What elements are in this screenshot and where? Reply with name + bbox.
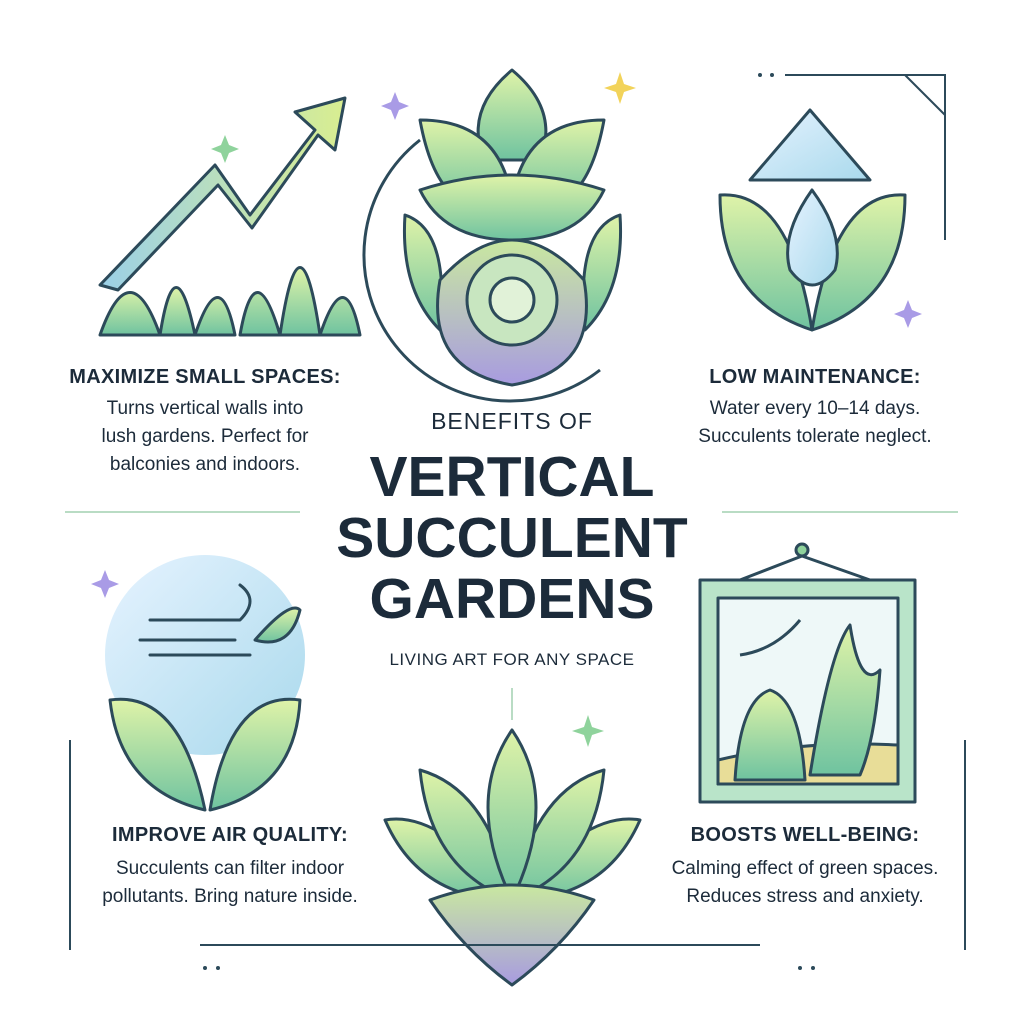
title: LIVING ART FOR ANY SPACE (389, 650, 635, 669)
title: VERTICAL (370, 445, 654, 509)
divider lines (65, 512, 958, 720)
text block: maximize small spaces (69, 366, 341, 475)
text block: maximize small spaces: MAXIMIZE SMALL SPACES: (69, 366, 341, 388)
text block: maximize small spaces: balconies and indoors. (110, 454, 300, 475)
text block: improve air quality: Succulents can filter indoor (116, 858, 344, 879)
title: BENEFITS OF (431, 408, 593, 434)
text block: maximize small spaces: lush gardens. Perfect for (102, 426, 308, 447)
text block: improve air quality: pollutants. Bring nature inside. (102, 886, 358, 907)
text block: improve air quality (102, 824, 358, 907)
text block: improve air quality: IMPROVE AIR QUALITY: (112, 824, 348, 846)
title (336, 408, 688, 669)
text block: boosts well-being: Calming effect of green spaces. (672, 858, 938, 879)
text block: boosts well-being: Reduces stress and anxiety. (686, 886, 924, 907)
icon: growth arrow with plants (100, 98, 360, 335)
title: GARDENS (369, 567, 655, 631)
icon: framed plant (700, 544, 915, 802)
title: SUCCULENT (336, 506, 688, 570)
decorative corners (70, 75, 965, 950)
sparkles (91, 92, 922, 598)
text block: low maintenance (698, 366, 932, 447)
text block: boosts well-being: BOOSTS WELL-BEING: (691, 824, 919, 846)
text block: maximize small spaces: Turns vertical walls into (107, 398, 303, 419)
text block: boosts well-being (672, 824, 938, 907)
text block: low maintenance: Water every 10–14 days. (710, 398, 920, 419)
text block: low maintenance: Succulents tolerate neglect. (698, 426, 932, 447)
icon: bottom lotus succulent (385, 730, 640, 985)
icon: water drop in leaves (720, 110, 905, 330)
icon: air quality (105, 555, 305, 810)
text block: low maintenance: LOW MAINTENANCE: (709, 366, 921, 388)
icon: central succulent (364, 70, 621, 401)
